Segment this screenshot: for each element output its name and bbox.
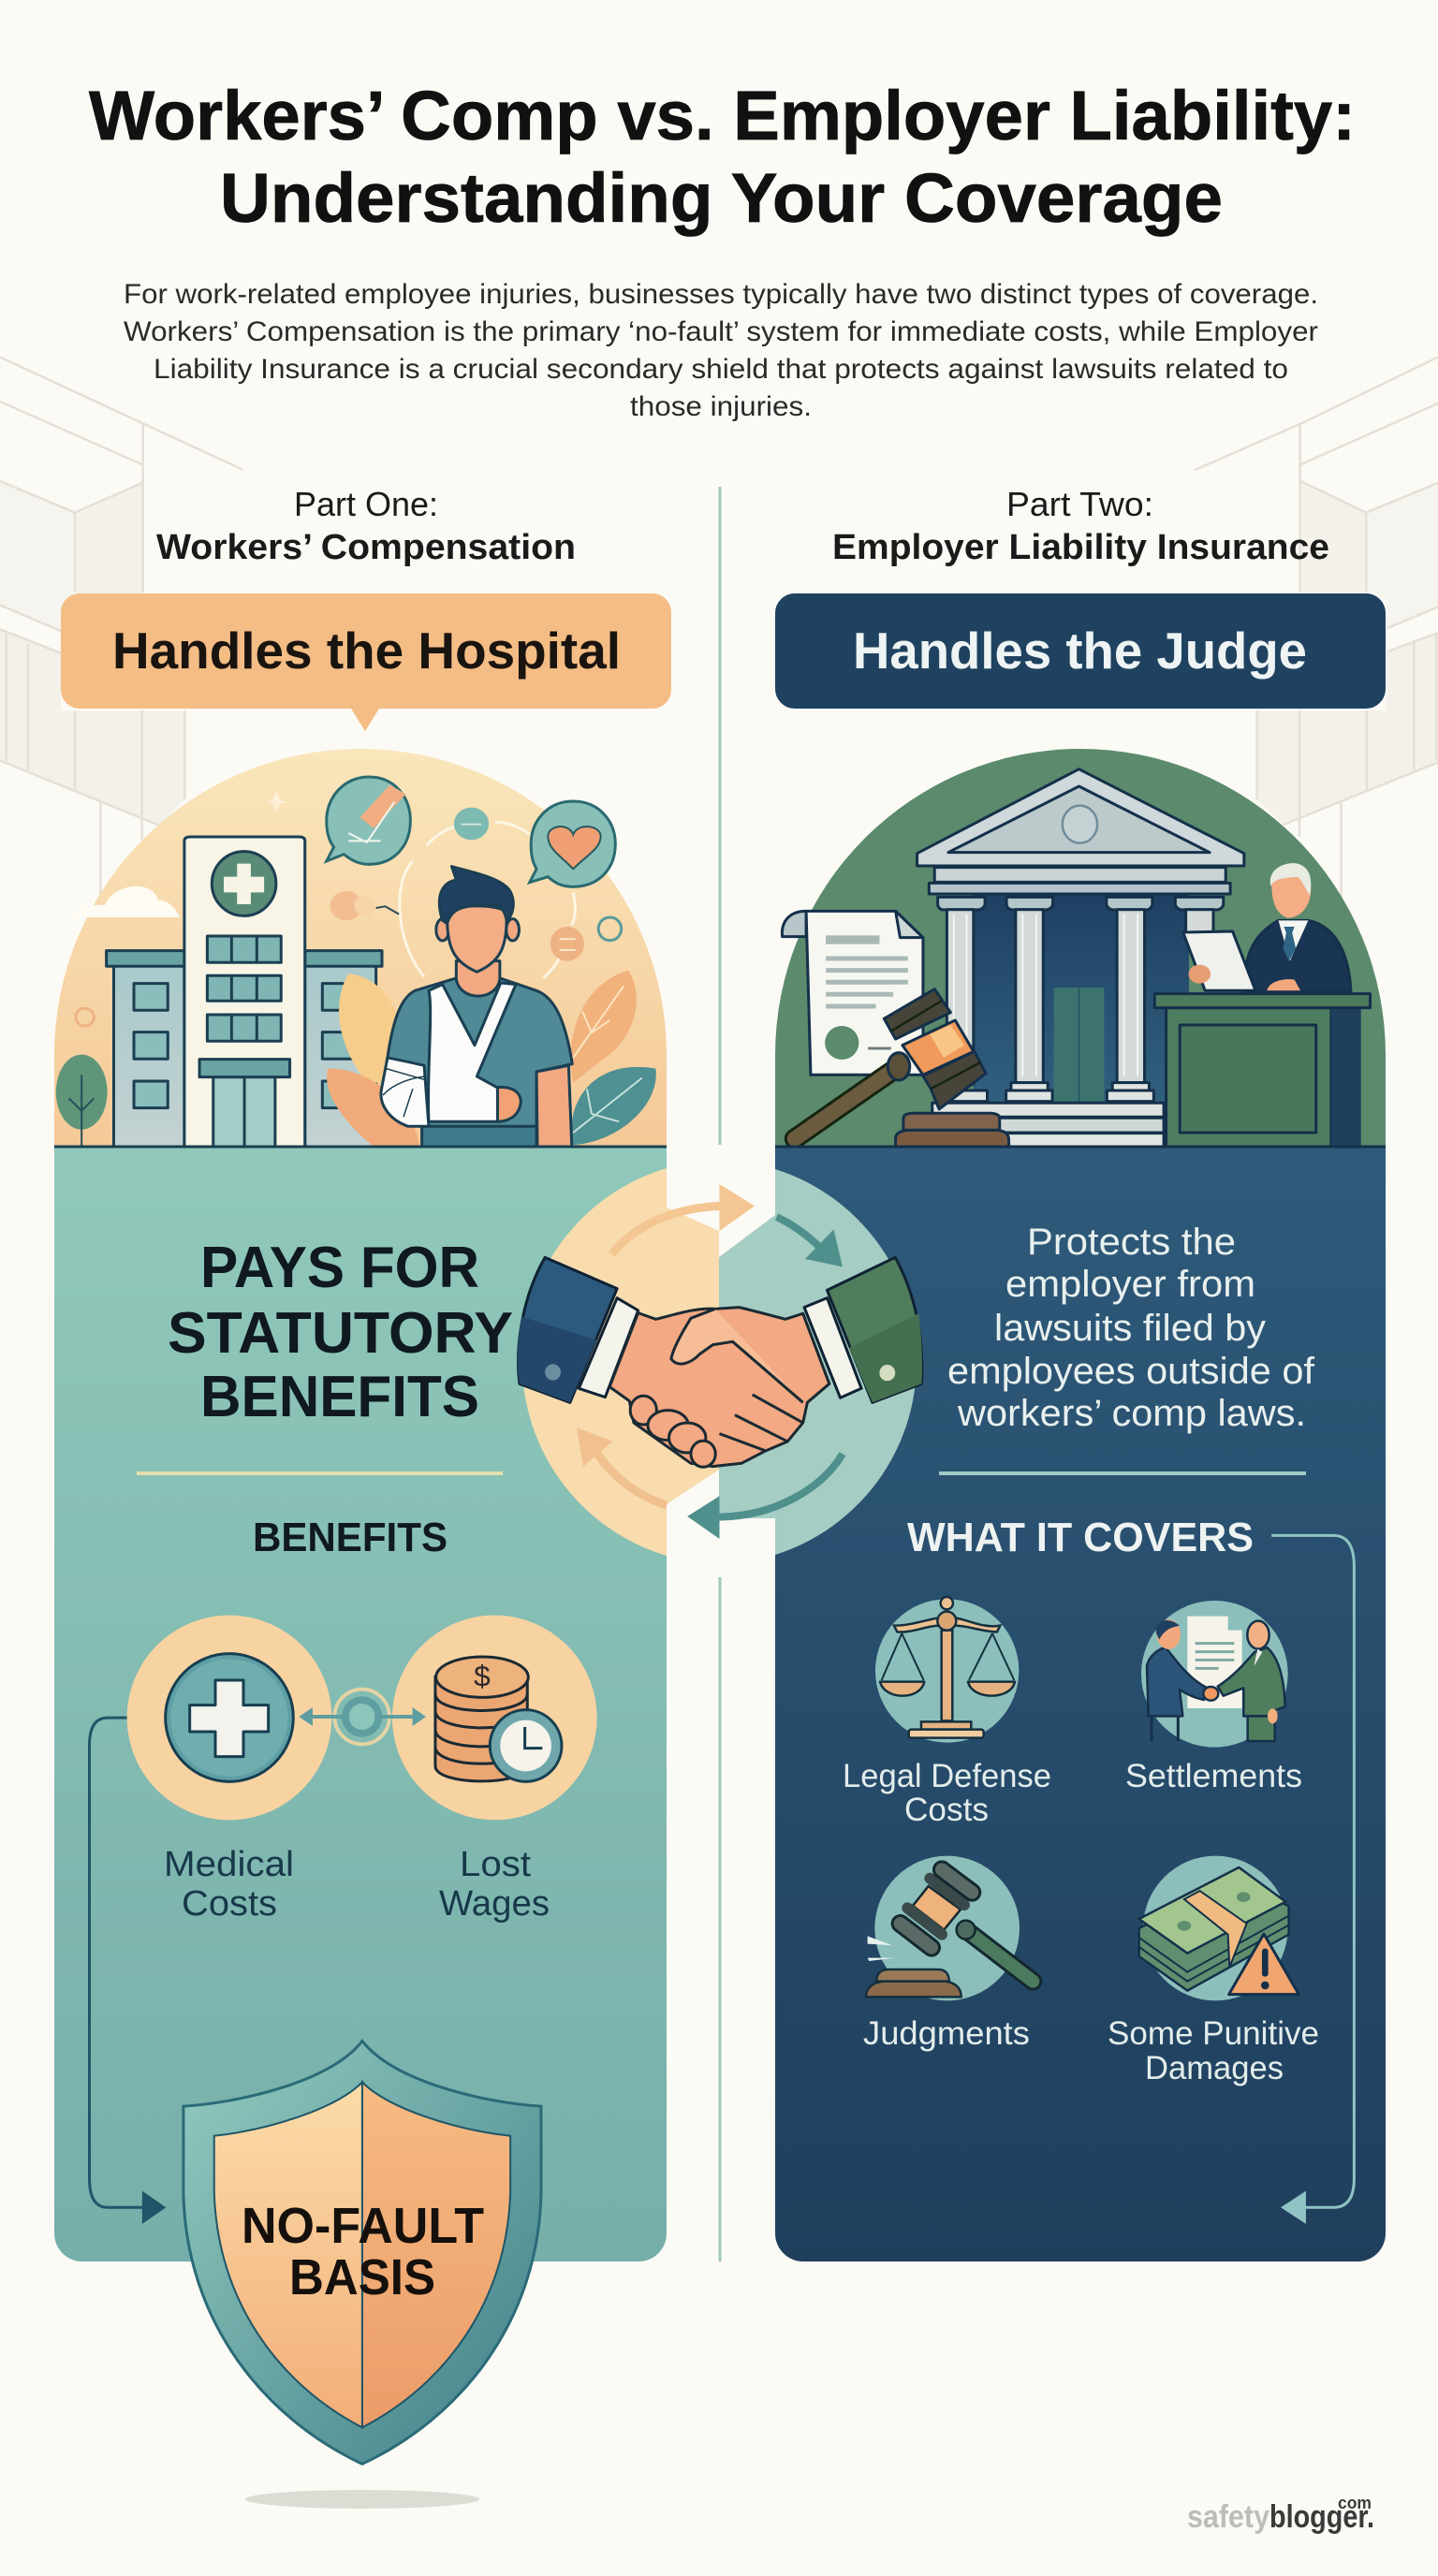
gavel — [795, 989, 986, 1139]
labels: what it covers: Judgments — [863, 2015, 1030, 2052]
columns — [938, 897, 1224, 1102]
heading: part two: Employer Liability Insurance — [832, 528, 1329, 567]
dashed orbit — [400, 822, 575, 978]
double arrow — [299, 1707, 426, 1726]
steps — [932, 1103, 1164, 1147]
intro text: Workers’ Compensation is the primary ‘no-fault’ system for immediate costs, while Employer — [124, 316, 1318, 347]
shield shadow — [245, 2490, 479, 2509]
protects text: lawsuits filed by — [994, 1308, 1266, 1349]
left cuff — [579, 1298, 638, 1398]
banner: handles the judge — [774, 593, 1387, 710]
tower — [184, 837, 305, 1147]
labels: what it covers: Some Punitive — [1108, 2015, 1319, 2052]
labels: medical costs, lost wages: Lost — [460, 1845, 531, 1884]
banner: handles the judge: Handles the Judge — [853, 622, 1307, 680]
watermark: com — [1338, 2494, 1372, 2512]
illustration: hospital and injured worker — [54, 749, 667, 1147]
icon: judgments gavel — [866, 1856, 1033, 2000]
intro text — [124, 279, 1318, 422]
judge — [1183, 863, 1351, 992]
labels: medical costs, lost wages — [164, 1845, 550, 1924]
no-fault shield — [183, 2041, 541, 2464]
icon: scales — [875, 1597, 1019, 1743]
background architecture right — [1195, 358, 1438, 899]
right cuff — [804, 1298, 861, 1398]
hospital scene — [56, 777, 656, 1147]
no-fault shield: NO-FAULT — [242, 2198, 484, 2254]
cloud — [68, 886, 180, 917]
left wing — [107, 951, 184, 1147]
icon: money and warning — [1139, 1856, 1299, 2000]
cycle arrow top left — [611, 1184, 755, 1254]
heading: part two — [832, 485, 1329, 567]
protects text: employees outside of — [947, 1351, 1315, 1392]
banner: handles the hospital: Handles the Hospital — [112, 622, 621, 680]
protects text: workers’ comp laws. — [957, 1393, 1306, 1434]
heading: part two: Part Two: — [1006, 485, 1153, 523]
watermark: safety — [1187, 2499, 1269, 2535]
document — [782, 911, 923, 1075]
intro text: Liability Insurance is a crucial secondary shield that protects against lawsuits related to — [154, 354, 1288, 385]
leaves — [327, 971, 656, 1147]
icon: settlements — [1141, 1601, 1288, 1748]
cycle arrow bottom right — [687, 1454, 843, 1539]
icon: coins circle: $ — [474, 1660, 491, 1693]
panel: workers' compensation — [54, 1147, 667, 2261]
illustration: courthouse and judge — [775, 749, 1386, 1147]
heading: part one: Part One: — [294, 485, 438, 523]
banner: handles the hospital — [61, 593, 671, 731]
tree — [56, 1055, 108, 1147]
labels: what it covers — [843, 1758, 1319, 2086]
watermark: blogger. — [1269, 2499, 1374, 2535]
title — [89, 77, 1356, 237]
intro text: For work-related employee injuries, businesses typically have two distinct types of coverage. — [124, 279, 1318, 310]
small floating dots — [76, 791, 622, 1026]
labels: what it covers: Damages — [1145, 2050, 1284, 2086]
labels: what it covers: Legal Defense — [843, 1758, 1051, 1794]
speech bubble: heart — [530, 801, 615, 886]
left sleeve — [518, 1257, 617, 1402]
labels: medical costs, lost wages: Costs — [182, 1884, 277, 1924]
icon: coins circle — [392, 1616, 597, 1820]
connector — [334, 1690, 389, 1744]
podium — [1154, 994, 1371, 1147]
protects text: Protects the — [1027, 1222, 1236, 1263]
heading: part one — [156, 485, 576, 567]
cycle arrow top right — [777, 1217, 843, 1266]
title: Workers’ Comp vs. Employer Liability: — [89, 77, 1356, 154]
labels: medical costs, lost wages: Medical — [164, 1845, 294, 1884]
door — [1054, 988, 1104, 1102]
no-fault shield: BASIS — [289, 2249, 435, 2305]
cycle arrow bottom left — [577, 1427, 667, 1505]
center divider — [719, 487, 721, 2261]
courthouse interior — [974, 894, 1189, 1103]
panel: employer liability — [775, 1147, 1386, 2261]
pays for statutory benefits: BENEFITS — [200, 1365, 479, 1429]
labels: what it covers: Settlements — [1125, 1758, 1302, 1794]
intro text: those injuries. — [630, 391, 812, 422]
flow arrow right — [1271, 1535, 1354, 2224]
pays for statutory benefits: STATUTORY — [168, 1301, 513, 1366]
right wing — [305, 951, 382, 1147]
pediment — [917, 769, 1244, 894]
peach half — [522, 1168, 719, 1556]
green dome — [775, 749, 1386, 1147]
title: Understanding Your Coverage — [220, 159, 1223, 237]
benefits heading: BENEFITS — [253, 1515, 448, 1560]
icon: medical circle — [127, 1616, 331, 1820]
background architecture left — [0, 358, 243, 899]
teal half — [719, 1169, 917, 1555]
watermark — [1187, 2494, 1374, 2535]
injured worker — [381, 867, 572, 1147]
what it covers heading: WHAT IT COVERS — [907, 1515, 1254, 1560]
sound block — [896, 1113, 1009, 1147]
labels: medical costs, lost wages: Wages — [439, 1884, 550, 1924]
section rules — [137, 1471, 503, 1475]
protects text: employer from — [1005, 1264, 1255, 1305]
handshake circle — [518, 1168, 922, 1556]
labels: what it covers: Costs — [904, 1792, 989, 1828]
pays for statutory benefits — [168, 1236, 513, 1429]
pays for statutory benefits: PAYS FOR — [200, 1236, 479, 1300]
peach dome — [54, 749, 667, 1147]
right sleeve — [827, 1257, 922, 1402]
protects text — [947, 1222, 1315, 1434]
clasped hands — [609, 1308, 829, 1467]
heading: part one: Workers’ Compensation — [156, 528, 576, 567]
flow arrow left — [90, 1718, 166, 2224]
benefit icons — [127, 1616, 597, 1820]
speech bubble: bandage — [327, 777, 410, 864]
